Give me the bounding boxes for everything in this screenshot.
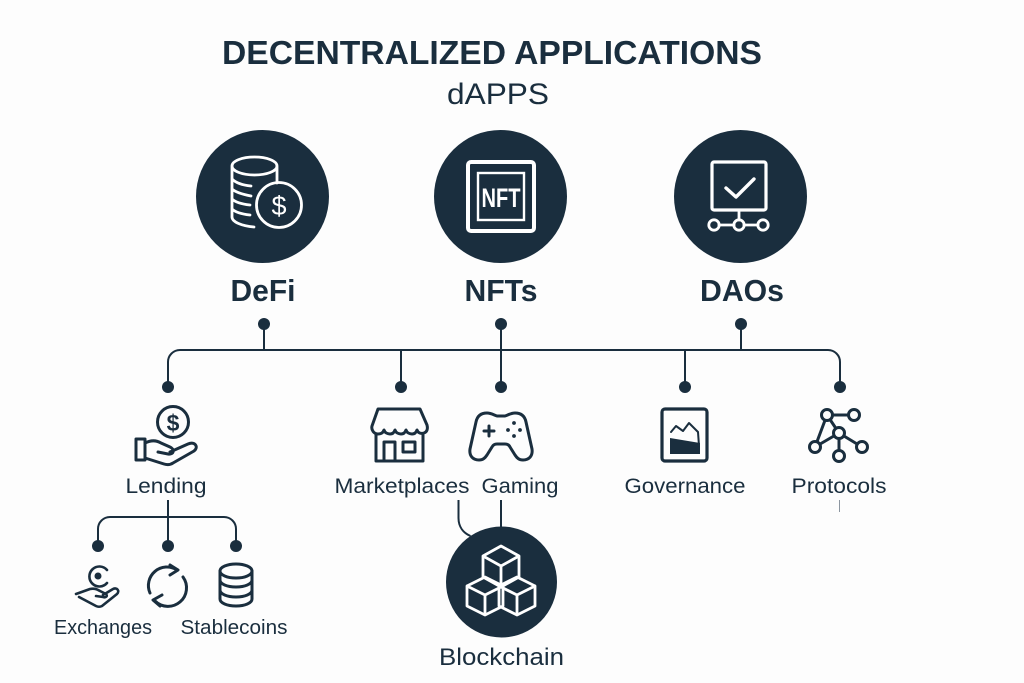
item: Stablecoins [180, 564, 288, 639]
panel: DAOs [674, 130, 807, 308]
label: Exchanges: Exchanges [54, 616, 152, 639]
item: Protocols [792, 410, 886, 498]
heading: NFTs: NFTs [464, 273, 538, 308]
icon: voting screen with nodes [709, 162, 768, 230]
label: Protocols: Protocols [792, 474, 886, 498]
icon: storefront [372, 409, 427, 461]
icon: sync arrows [148, 565, 187, 606]
label: Blockchain: Blockchain [439, 644, 564, 671]
item: Gaming [470, 413, 558, 498]
icon: document with chart [662, 409, 707, 461]
connector tree: Lending children [92, 500, 242, 552]
icon: NFT frame: NFT [482, 183, 521, 213]
icon: NFT frame [468, 162, 534, 231]
panel: NFTs [434, 130, 567, 308]
connector tree: top [162, 318, 846, 393]
icon: hand with coin [76, 566, 118, 607]
panel: DeFi [196, 130, 329, 308]
panel: Blockchain [439, 526, 564, 671]
label: Stablecoins: Stablecoins [180, 616, 288, 639]
item: Governance [624, 409, 746, 498]
icon: network graph [810, 410, 868, 462]
label: Lending: Lending [126, 474, 206, 498]
item: Lending [126, 406, 206, 498]
item: Marketplaces [334, 409, 470, 498]
subtitle: dAPPS [447, 78, 549, 111]
icon: database stack [220, 564, 252, 606]
icon: game controller [470, 413, 532, 460]
item: Exchanges [54, 566, 152, 639]
icon: coin stack with dollar [232, 157, 302, 228]
label: Governance: Governance [624, 474, 746, 498]
icon: three cubes [467, 546, 535, 615]
heading: DeFi: DeFi [230, 273, 296, 308]
heading: DAOs: DAOs [700, 273, 784, 308]
label: Gaming: Gaming [482, 474, 558, 498]
title: DECENTRALIZED APPLICATIONS [222, 34, 762, 71]
icon: hand holding coin: $ [167, 410, 180, 436]
dollar sign: $ [271, 191, 287, 221]
connectors to Blockchain [458, 500, 501, 536]
label: Marketplaces: Marketplaces [334, 474, 470, 498]
